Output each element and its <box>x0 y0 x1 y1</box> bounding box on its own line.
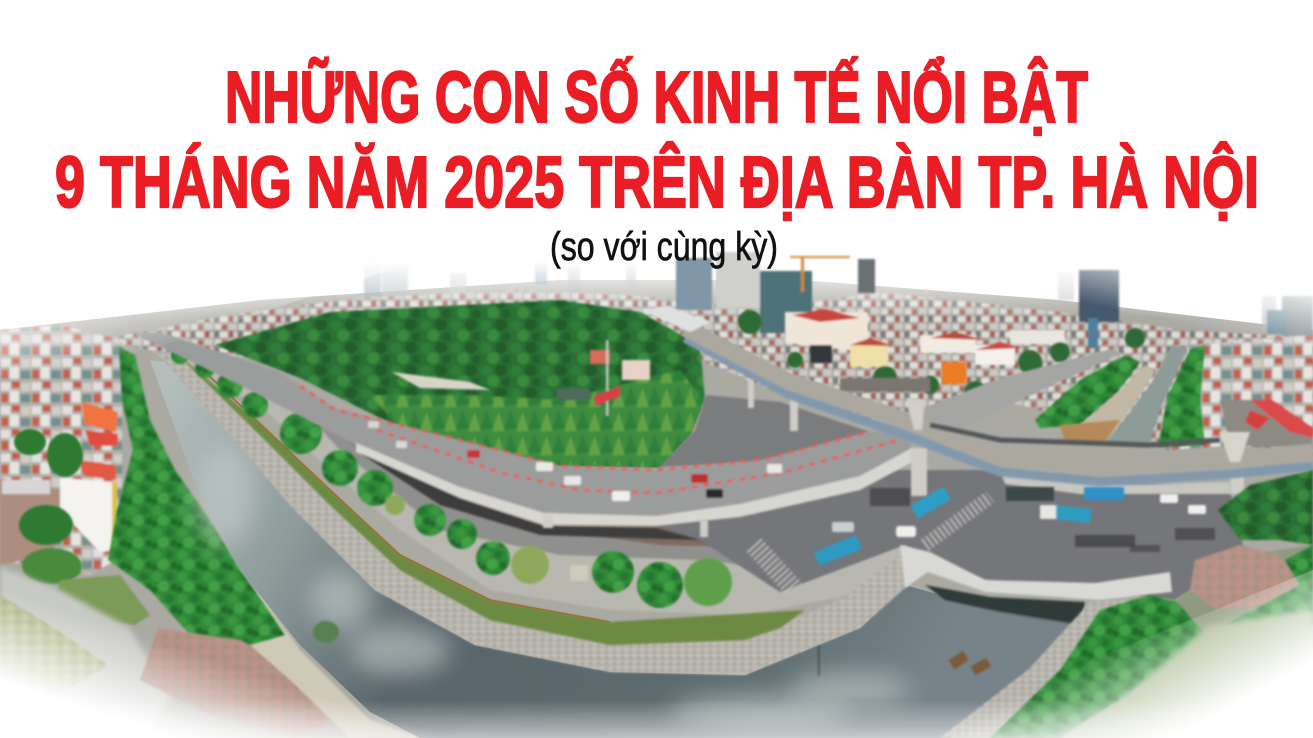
stone embankment <box>152 350 925 675</box>
flyover pillars <box>543 378 1244 537</box>
parking lot <box>0 478 70 565</box>
central city buildings <box>738 309 1145 403</box>
metro T piers <box>906 398 925 430</box>
brown median under flyover <box>345 440 785 548</box>
palm trees <box>14 429 83 584</box>
white bottom edge fade <box>0 700 1313 738</box>
right edge foliage <box>1225 545 1313 640</box>
plaza behind the flyover <box>660 395 870 467</box>
river water <box>150 360 1082 738</box>
intersection road surface <box>656 470 1245 600</box>
right canal water <box>1105 345 1188 448</box>
bottom left flower bed <box>140 628 330 738</box>
park building and roofs <box>392 340 650 416</box>
right embankment trees <box>1035 355 1140 428</box>
riverside trees <box>171 346 732 608</box>
left tree strip <box>108 347 295 658</box>
upper barrier <box>300 386 869 470</box>
bottom left pale road <box>0 567 170 738</box>
right canal bank <box>1080 365 1155 440</box>
main flyover deck <box>130 332 916 540</box>
green verge along the embankment <box>175 352 805 645</box>
street trees among buildings <box>738 310 1145 403</box>
road bridge over river <box>900 545 1172 600</box>
rust line along verge <box>205 372 610 622</box>
lighter foreground park trees <box>370 370 703 467</box>
near skyline towers <box>676 252 1313 336</box>
right embankment lower <box>940 600 1130 738</box>
large dark tree <box>1218 470 1313 545</box>
ground base under the scene <box>0 280 1313 738</box>
white bottom-right fade <box>900 570 1313 738</box>
white bottom-left fade <box>0 590 500 738</box>
red roofed block <box>1220 400 1313 450</box>
right canal tree strip <box>1158 345 1205 447</box>
right-side city blocks <box>1165 335 1313 455</box>
subtitle: (so với cùng kỳ) <box>550 225 778 269</box>
bottom left shrub <box>55 575 150 625</box>
cloud reflections <box>195 445 910 730</box>
left house block <box>0 325 122 575</box>
metro station roof <box>640 306 712 332</box>
right side ground patch <box>1175 545 1313 640</box>
lower right slope <box>1060 610 1313 738</box>
far skyline <box>364 245 1276 332</box>
foreground right trees <box>990 595 1210 738</box>
upper rear flyover to the right <box>880 348 1120 445</box>
city blocks behind the park <box>100 290 1313 445</box>
white top-left fade <box>0 240 480 400</box>
white haze over skyline <box>0 240 1313 318</box>
white top-right fade <box>880 240 1313 380</box>
flyover shadow <box>360 453 700 540</box>
water under the bridge <box>925 585 1085 625</box>
park trees <box>215 300 705 467</box>
flyover side wall <box>356 443 916 526</box>
small island and boats <box>313 621 991 676</box>
lower barrier <box>377 430 899 493</box>
cars <box>368 421 782 501</box>
construction site <box>1060 420 1120 442</box>
metro base platform <box>1000 470 1232 494</box>
bottom left grass slope <box>0 595 108 700</box>
sand river bank <box>240 568 420 738</box>
buses and traffic on the intersection <box>814 487 1215 566</box>
service road under flyover <box>280 385 790 570</box>
title <box>55 56 1259 223</box>
metro line viaduct <box>640 306 1313 494</box>
pavement beside the road <box>135 340 925 615</box>
pink tree <box>1190 545 1300 610</box>
pedestrian crossings <box>754 497 990 590</box>
